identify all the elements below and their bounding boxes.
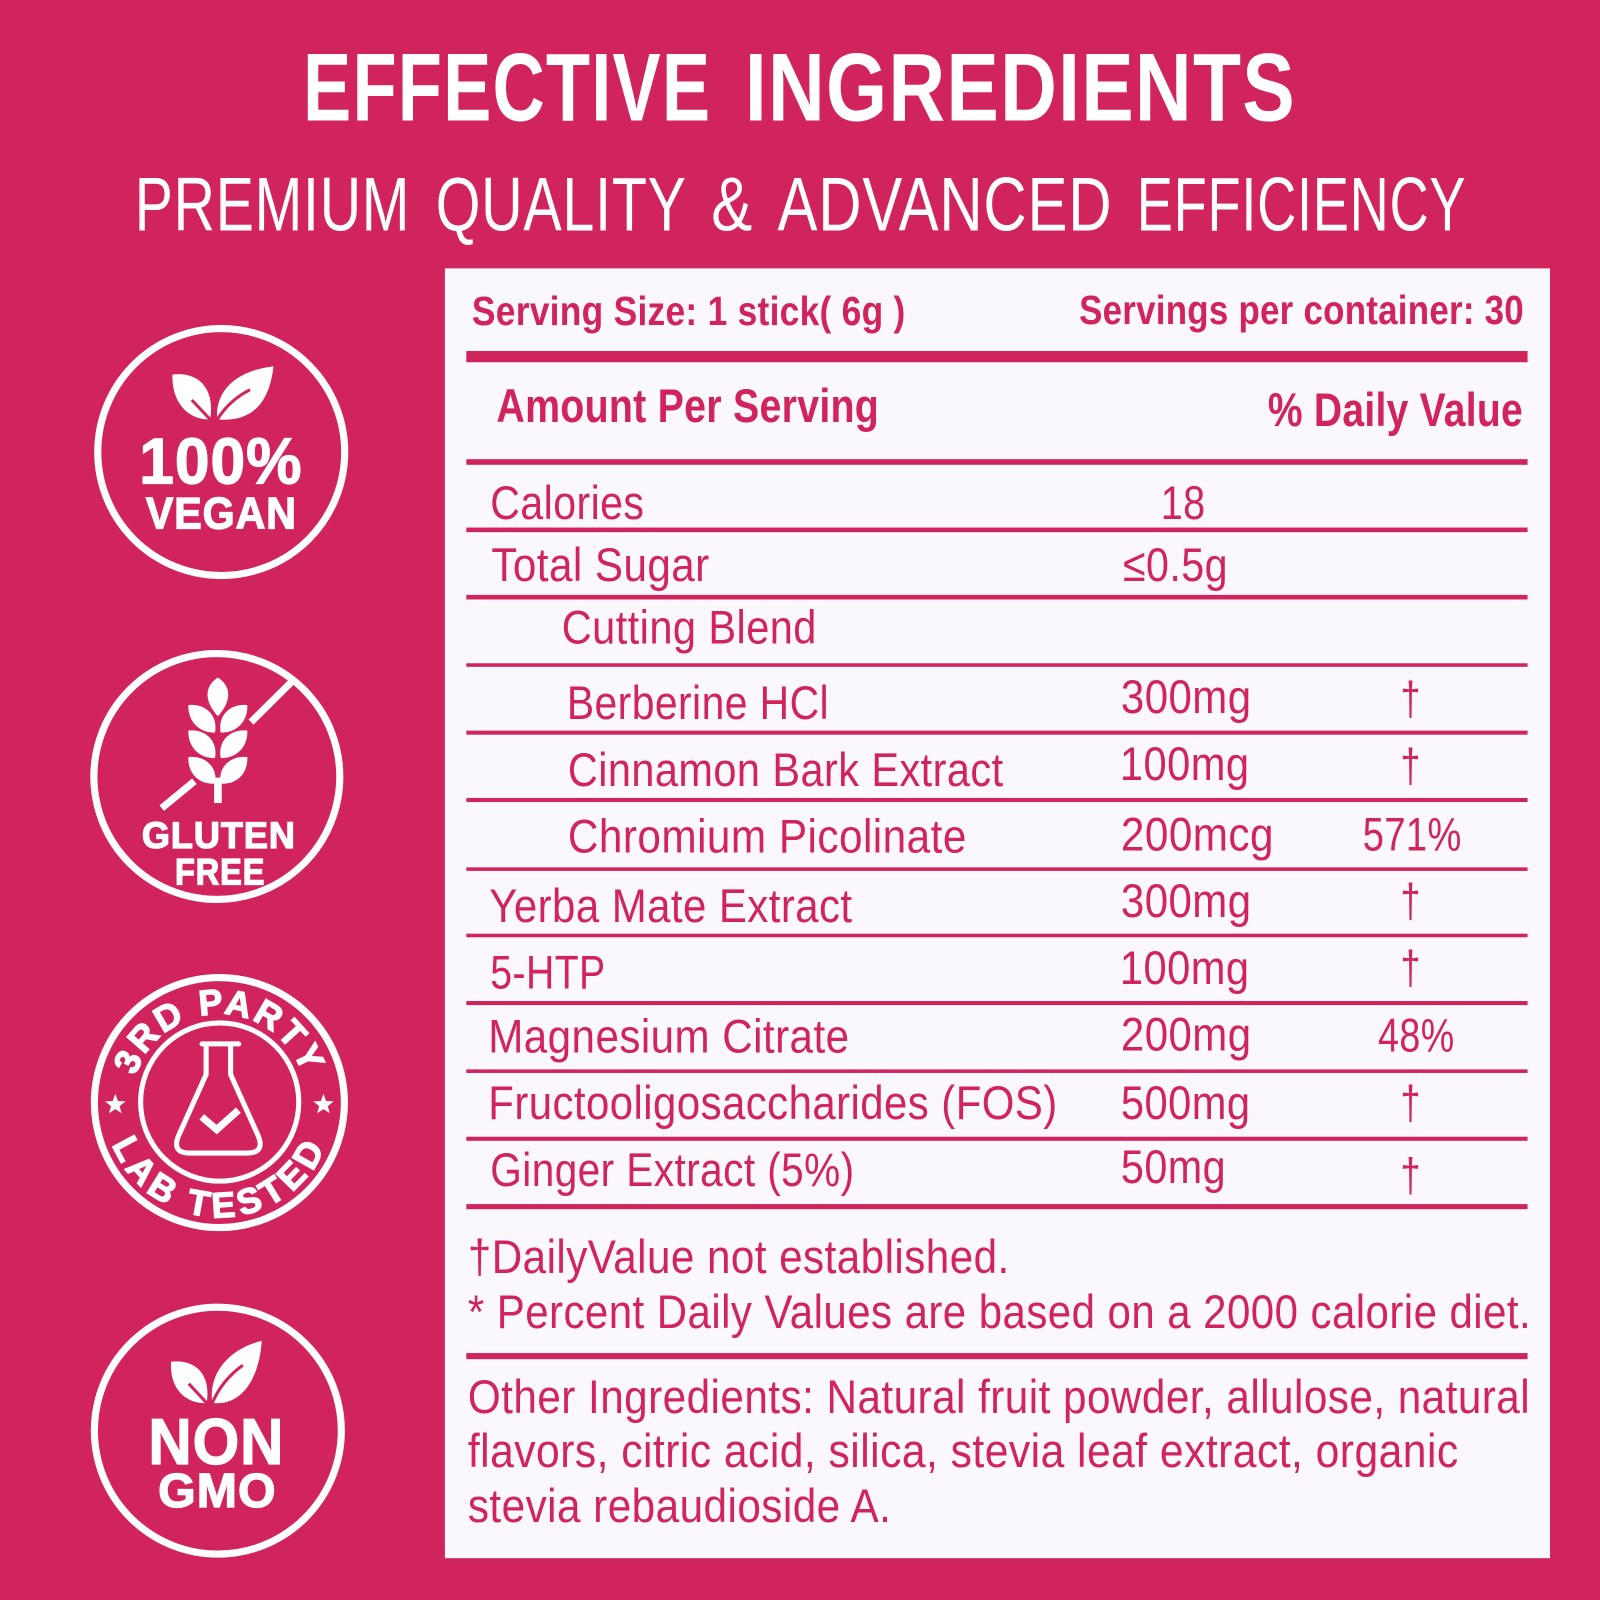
title: EFFECTIVE bbox=[303, 32, 711, 141]
row: calories: 18 bbox=[1161, 477, 1206, 529]
badge text: 3rd party: 3RD PARTY bbox=[114, 989, 326, 1074]
row: total sugar: ≤0.5g bbox=[1123, 539, 1228, 591]
other ingredients bbox=[468, 1371, 1530, 1532]
row: cinnamon bark extract: † bbox=[1401, 740, 1421, 792]
row: yerba mate extract: Yerba Mate Extract bbox=[489, 880, 853, 932]
row: magnesium citrate: Magnesium Citrate bbox=[488, 1011, 849, 1063]
serving size: Serving Size: 1 stick( 6g ) bbox=[472, 288, 906, 334]
row: 5-htp: † bbox=[1401, 942, 1421, 994]
row: yerba mate extract: † bbox=[1401, 875, 1421, 927]
badge text: free: FREE bbox=[175, 852, 265, 893]
row: cinnamon bark extract: 100mg bbox=[1120, 738, 1249, 790]
row: ginger extract: † bbox=[1401, 1149, 1421, 1201]
subtitle: PREMIUM bbox=[135, 163, 410, 248]
row: magnesium citrate bbox=[488, 1009, 1455, 1063]
servings per container: Servings per container: 30 bbox=[1079, 287, 1524, 333]
other ingredients: stevia rebaudioside A. bbox=[468, 1480, 891, 1532]
badge text: non: NON bbox=[148, 1405, 284, 1478]
badge text: gmo: GMO bbox=[158, 1465, 277, 1518]
row: total sugar: Total Sugar bbox=[491, 539, 710, 591]
row: fructooligosaccharides: 500mg bbox=[1121, 1077, 1251, 1129]
row: magnesium citrate: 48% bbox=[1378, 1010, 1455, 1062]
other ingredients: flavors, citric acid, silica, stevia leaf extract, organic bbox=[468, 1425, 1459, 1477]
amount per serving header: Amount Per Serving bbox=[496, 380, 879, 432]
row: fructooligosaccharides bbox=[488, 1077, 1421, 1129]
badge: gluten free bbox=[94, 654, 340, 899]
icon: crossed-out wheat bbox=[162, 678, 292, 808]
daily value header: % Daily Value bbox=[1268, 384, 1523, 436]
row: berberine: † bbox=[1401, 673, 1421, 725]
icon: flask with check bbox=[177, 1044, 260, 1153]
row: berberine: 300mg bbox=[1121, 671, 1252, 723]
row: berberine bbox=[567, 671, 1421, 729]
badge: 3rd party lab tested bbox=[90, 974, 348, 1232]
row: calories bbox=[490, 477, 1206, 529]
row: fructooligosaccharides: † bbox=[1401, 1077, 1421, 1129]
row: 5-htp: 100mg bbox=[1120, 942, 1249, 994]
badge text: lab tested: LAB TESTED bbox=[112, 1134, 321, 1218]
row: chromium picolinate bbox=[568, 809, 1462, 863]
subtitle: QUALITY bbox=[436, 163, 687, 248]
subtitle: & bbox=[711, 163, 753, 248]
title: INGREDIENTS bbox=[745, 32, 1296, 141]
row: cinnamon bark extract bbox=[568, 738, 1421, 796]
row: cinnamon bark extract: Cinnamon Bark Extract bbox=[568, 744, 1004, 796]
row: chromium picolinate: 571% bbox=[1363, 809, 1462, 861]
row: total sugar bbox=[491, 539, 1228, 591]
panel: supplement facts bbox=[445, 268, 1550, 1558]
row: chromium picolinate: 200mcg bbox=[1121, 809, 1274, 861]
icon: vegan leaves bbox=[172, 366, 273, 420]
row: yerba mate extract bbox=[489, 875, 1421, 932]
row: chromium picolinate: Chromium Picolinate bbox=[568, 811, 967, 863]
row: calories: Calories bbox=[490, 477, 644, 529]
row: ginger extract: 50mg bbox=[1121, 1141, 1226, 1193]
icon: star right bbox=[313, 1094, 334, 1113]
badge text: 100%: 100% bbox=[139, 425, 303, 498]
title bbox=[303, 32, 1296, 141]
row: 5-htp bbox=[490, 942, 1421, 998]
subtitle: EFFICIENCY bbox=[1137, 163, 1466, 248]
row: magnesium citrate: 200mg bbox=[1121, 1009, 1252, 1061]
row: cutting blend: Cutting Blend bbox=[562, 601, 817, 653]
row: fructooligosaccharides: Fructooligosaccharides (FOS) bbox=[488, 1077, 1058, 1129]
badge: 100% vegan bbox=[98, 329, 345, 576]
icon: star left bbox=[105, 1094, 126, 1113]
row: 5-htp: 5-HTP bbox=[490, 946, 606, 998]
row: ginger extract: Ginger Extract (5%) bbox=[490, 1144, 855, 1196]
footnotes bbox=[468, 1231, 1531, 1338]
subtitle: ADVANCED bbox=[778, 163, 1112, 248]
row: ginger extract bbox=[490, 1141, 1421, 1201]
badge text: vegan: VEGAN bbox=[146, 488, 297, 539]
row: yerba mate extract: 300mg bbox=[1121, 875, 1252, 927]
badge text: gluten: GLUTEN bbox=[142, 815, 296, 856]
badge: non gmo bbox=[94, 1307, 341, 1554]
icon: non gmo leaves bbox=[171, 1341, 262, 1403]
row: berberine: Berberine HCl bbox=[567, 677, 829, 729]
subtitle bbox=[135, 163, 1466, 248]
footnotes: †DailyValue not established. bbox=[468, 1231, 1010, 1283]
